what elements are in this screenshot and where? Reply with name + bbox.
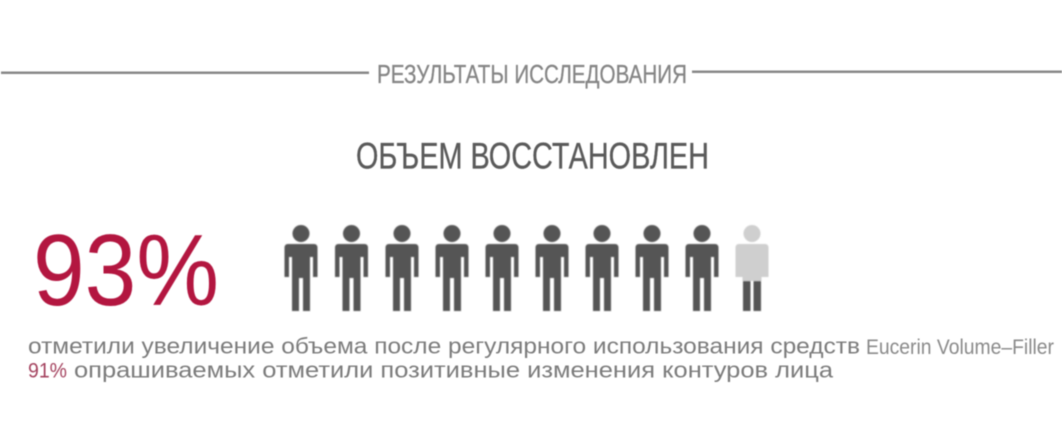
- highlighted 91%: 91%: [28, 360, 67, 382]
- section heading text: РЕЗУЛЬТАТЫ ИССЛЕДОВАНИЯ: [377, 61, 687, 89]
- icon: person 10, partly filled: [736, 225, 768, 311]
- second line of description: опрашиваемых отметили позитивные изменения контуров лица: [74, 358, 834, 382]
- pictogram: 9 of 10 people: [284, 225, 768, 311]
- icon: person 7: [586, 225, 618, 311]
- icon: person 2: [335, 225, 368, 311]
- icon: person 8: [636, 225, 668, 311]
- icon: person 5: [486, 225, 518, 311]
- icon: person 6: [536, 225, 568, 311]
- icon: person 3: [386, 225, 418, 311]
- title: ОБЪЕМ ВОССТАНОВЛЕН: [356, 136, 709, 176]
- icon: person 9: [686, 225, 718, 311]
- icon: person 1: [284, 225, 318, 311]
- first line of description: отметили увеличение объема после регулярного использования средств: [28, 334, 860, 358]
- description text: [28, 334, 1054, 382]
- big percentage: 93%: [33, 215, 219, 327]
- icon: person 4: [436, 225, 468, 311]
